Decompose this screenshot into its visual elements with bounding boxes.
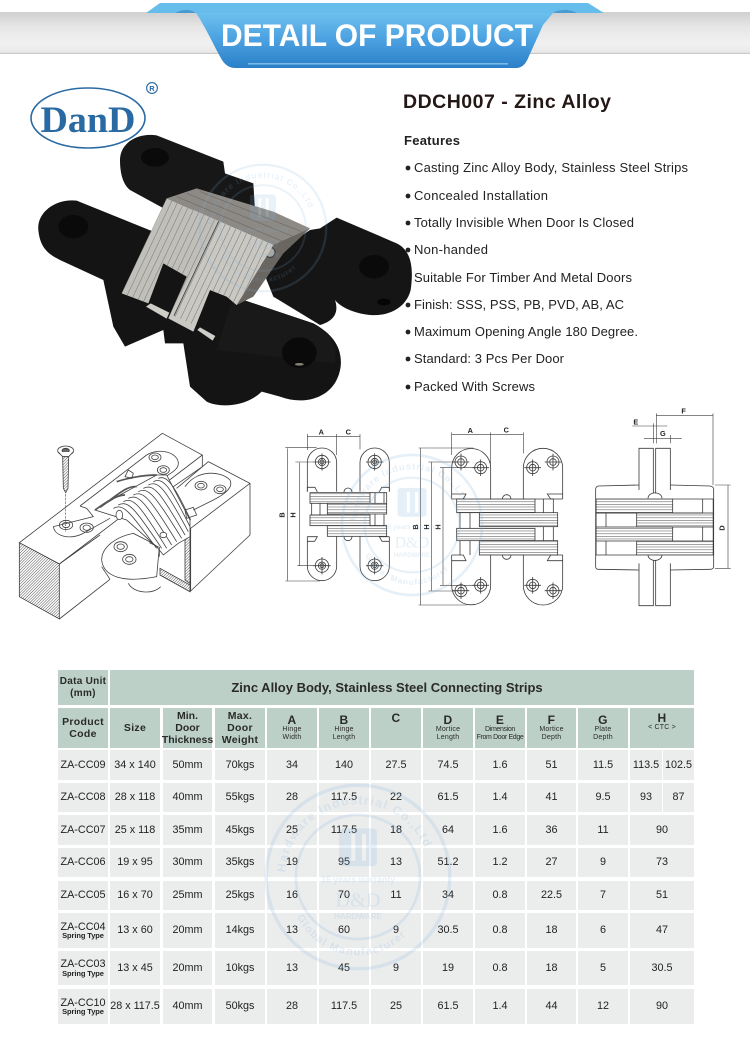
row ZA-CC06: 19 x 95 [117,856,153,868]
row ZA-CC05: ZA-CC05 [60,889,106,901]
row ZA-CC07: 25 x 118 [115,824,155,836]
table column headers: Thickness [162,734,213,746]
holes [313,453,331,471]
row ZA-CC08: 117.5 [331,791,357,803]
back right arm [260,218,412,325]
row ZA-CC06: 30mm [172,856,202,868]
features list: Maximum Opening Angle 180 Degree. [414,324,638,339]
row ZA-CC04: 18 [545,924,558,936]
technical drawing: hinge front view small [277,428,389,581]
isometric installation drawing [19,433,250,619]
row ZA-CC09: 11.5 [593,759,613,771]
row ZA-CC10: 28 x 117.5 [110,1000,160,1012]
row ZA-CC05: 25kgs [226,889,254,901]
steel strips side [237,228,310,305]
row ZA-CC08: 28 [286,791,298,803]
table column headers: Max. [228,710,252,722]
table column headers: Length [437,734,459,740]
row ZA-CC09 [58,750,694,780]
table title row: (mm) [70,688,96,698]
technical drawing: hinge mortice view [596,407,731,606]
table column headers: Dimension [485,726,515,732]
row ZA-CC10: 50kgs [226,1000,254,1012]
table column headers: Product [62,716,104,728]
row ZA-CC07: 1.6 [492,824,508,836]
title: DETAIL OF PRODUCT [221,17,533,53]
row ZA-CC09: 27.5 [385,759,406,771]
technical drawing: hinge front view large: H [422,524,431,530]
table column headers: A [288,712,296,726]
row ZA-CC10: 28 [286,1000,298,1012]
features list: Finish: SSS, PSS, PB, PVD, AB, AC [414,297,624,312]
features list: Standard: 3 Pcs Per Door [414,351,565,366]
table column headers: F [548,712,555,726]
row ZA-CC06: 95 [338,856,350,868]
watermark: drawings [342,455,482,595]
row ZA-CC04: 13 x 60 [117,924,153,936]
row ZA-CC04: 13 [286,924,298,936]
plates [452,448,563,499]
strips [310,493,370,503]
row ZA-CC03: 13 [286,962,298,974]
row ZA-CC03 [58,951,694,985]
row ZA-CC09: 113.5 [633,759,659,771]
row ZA-CC04 [58,913,694,948]
row ZA-CC05: 25mm [172,889,202,901]
row ZA-CC10: ZA-CC10 [60,997,106,1009]
row ZA-CC10: 40mm [172,1000,202,1012]
row ZA-CC08: 40mm [172,791,202,803]
table column headers: From Door Edge [477,734,523,740]
row ZA-CC03: 19 [442,962,454,974]
features heading: Features [404,133,460,148]
technical drawing: hinge front view large: H [433,524,442,530]
strips [457,499,535,513]
row ZA-CC04: 47 [656,924,668,936]
table column headers: Mortice [539,726,564,732]
row ZA-CC09: 50mm [172,759,202,771]
row ZA-CC03: 10kgs [226,962,254,974]
row ZA-CC09: 34 [286,759,298,771]
screw [58,446,74,532]
table column headers: Size [124,722,146,734]
table column headers: Door [175,722,200,734]
table title row: Zinc Alloy Body, Stainless Steel Connecting Strips [231,680,543,694]
row ZA-CC07: 90 [656,824,668,836]
row ZA-CC06: 1.2 [492,856,508,868]
row ZA-CC08: ZA-CC08 [60,791,106,803]
row ZA-CC08: 93 [640,791,652,803]
hinge plates [53,451,178,537]
row ZA-CC06: 13 [390,856,402,868]
table column headers: Depth [542,734,561,740]
row ZA-CC03: 30.5 [651,962,672,974]
row ZA-CC09: 102.5 [665,759,692,771]
dimensions [632,413,731,568]
brand logo: DanD [40,100,136,141]
row ZA-CC03: Spring Type [62,969,104,978]
technical drawing: hinge front view small: B [277,512,286,518]
row ZA-CC06: ZA-CC06 [60,856,106,868]
row ZA-CC07: 35mm [172,824,202,836]
table column headers: G [598,712,608,726]
row ZA-CC06: 9 [600,856,606,868]
row ZA-CC07: 18 [390,824,402,836]
row ZA-CC03: ZA-CC03 [60,958,106,970]
row ZA-CC03: 20mm [172,962,202,974]
row ZA-CC04: 14kgs [226,924,254,936]
technical drawing: hinge mortice view: D [718,525,727,531]
table title row [58,670,694,705]
row ZA-CC04: 20mm [172,924,202,936]
row ZA-CC08: 22 [390,791,402,803]
table column headers: D [444,712,452,726]
table column headers: Length [333,734,355,740]
row ZA-CC06: 35kgs [226,856,254,868]
row ZA-CC04: 9 [393,924,399,936]
row ZA-CC05: 0.8 [492,889,508,901]
technical drawing: hinge front view large [411,426,563,605]
row ZA-CC10: 44 [545,1000,558,1012]
table column headers: Hinge [334,726,354,732]
technical drawing: hinge mortice view: E [633,417,638,426]
row ZA-CC09: 51 [545,759,558,771]
row ZA-CC07: 11 [597,824,609,836]
features list: Packed With Screws [414,379,536,394]
row ZA-CC04: 30.5 [437,924,458,936]
table column headers: Weight [222,734,258,746]
technical drawing: hinge front view small: C [346,428,352,437]
table title row: Data Unit [60,676,106,686]
door block right [177,462,250,591]
row ZA-CC07: ZA-CC07 [60,824,106,836]
features list: Suitable For Timber And Metal Doors [414,270,632,285]
row ZA-CC08: 55kgs [226,791,254,803]
row ZA-CC07: 45kgs [226,824,254,836]
row ZA-CC06 [58,848,694,877]
table column headers: C [392,711,400,725]
row ZA-CC10: Spring Type [62,1007,104,1016]
hinge strips [95,475,190,555]
strips [596,499,673,513]
row ZA-CC09: 1.6 [492,759,508,771]
row ZA-CC08: 41 [545,791,558,803]
table column headers [58,708,694,748]
product title: DDCH007 - Zinc Alloy [403,91,611,113]
row ZA-CC05: 34 [442,889,454,901]
table column headers: Door [227,722,253,734]
row ZA-CC03: 0.8 [492,962,508,974]
row ZA-CC09: ZA-CC09 [60,759,106,771]
row ZA-CC03: 45 [338,962,350,974]
dimensions [285,434,360,581]
row ZA-CC10: 12 [597,1000,609,1012]
row ZA-CC05: 11 [390,889,402,901]
row ZA-CC05: 51 [656,889,668,901]
brand logo [31,83,157,148]
technical drawing: hinge front view large: A [468,426,474,435]
hinge pins [146,303,169,319]
table column headers: Depth [593,734,613,740]
technical drawing: hinge front view large: B [411,524,420,530]
row ZA-CC09: 74.5 [437,759,458,771]
row ZA-CC04: ZA-CC04 [60,921,106,933]
row ZA-CC03: 18 [545,962,558,974]
holes [453,454,469,470]
row ZA-CC08: 28 x 118 [115,791,155,803]
table column headers: Plate [595,726,611,732]
header ribbon banner [146,3,604,68]
table column headers: < CTC > [648,724,676,731]
watermark: table [266,785,450,969]
features list: Totally Invisible When Door Is Closed [414,215,634,230]
row ZA-CC05 [58,881,694,910]
table column headers: H [658,711,666,725]
row ZA-CC08: 9.5 [595,791,610,803]
row ZA-CC04: 60 [338,924,350,936]
row ZA-CC06: 73 [656,856,668,868]
plates [639,448,670,493]
row ZA-CC09: 70kgs [226,759,254,771]
technical drawing: hinge front view large: C [504,426,510,435]
back left arm [120,135,255,210]
front arm [38,200,341,405]
row ZA-CC05: 7 [600,889,606,901]
watermark: photo [200,165,326,291]
row ZA-CC07: 36 [545,824,558,836]
row ZA-CC05: 22.5 [541,889,562,901]
brand logo: R [149,84,155,93]
row ZA-CC06: 51.2 [437,856,458,868]
table column headers: Mortice [436,726,460,732]
technical drawing: hinge front view small: H [289,512,298,518]
row ZA-CC06: 27 [545,856,558,868]
row ZA-CC04: 6 [600,924,606,936]
row ZA-CC07: 25 [286,824,298,836]
row ZA-CC08: 87 [672,791,684,803]
header grey bar [0,12,750,54]
row ZA-CC10: 1.4 [492,1000,508,1012]
row ZA-CC10: 25 [390,1000,402,1012]
row ZA-CC08: 1.4 [492,791,508,803]
table column headers: Hinge [282,726,302,732]
features list: Concealed Installation [414,188,548,203]
table column headers: E [496,712,504,726]
technical drawing: hinge mortice view: G [660,429,666,438]
row ZA-CC09: 140 [335,759,353,771]
table column headers: Code [69,728,97,740]
row ZA-CC07: 64 [442,824,454,836]
table column headers: Width [283,734,301,740]
row ZA-CC06: 19 [286,856,298,868]
plates [307,448,389,492]
steel strips top face [167,188,310,247]
features list: Non-handed [414,242,488,257]
dimensions [419,432,523,605]
features list [404,133,688,394]
features list: Casting Zinc Alloy Body, Stainless Steel Strips [414,160,688,175]
row ZA-CC05: 70 [338,889,350,901]
row ZA-CC05: 16 [286,889,298,901]
row ZA-CC09: 34 x 140 [114,759,156,771]
product photo: black concealed hinge [38,135,412,405]
row ZA-CC10: 61.5 [437,1000,458,1012]
row ZA-CC04: 0.8 [492,924,508,936]
row ZA-CC08 [58,783,694,812]
row ZA-CC08: 61.5 [437,791,458,803]
row ZA-CC07: 117.5 [331,824,357,836]
steel strips front face [122,198,273,332]
row ZA-CC04: Spring Type [62,931,104,940]
row ZA-CC03: 13 x 45 [117,962,153,974]
row ZA-CC10: 117.5 [331,1000,357,1012]
row ZA-CC03: 9 [393,962,399,974]
row ZA-CC05: 16 x 70 [117,889,153,901]
door block left [19,433,202,564]
table column headers: Min. [177,710,198,722]
row ZA-CC10: 90 [656,1000,668,1012]
row ZA-CC10 [58,989,694,1024]
row ZA-CC03: 5 [600,962,606,974]
technical drawing: hinge front view small: A [319,428,325,437]
table column headers: B [340,712,348,726]
row ZA-CC07 [58,815,694,845]
technical drawing: hinge mortice view: F [681,407,686,416]
